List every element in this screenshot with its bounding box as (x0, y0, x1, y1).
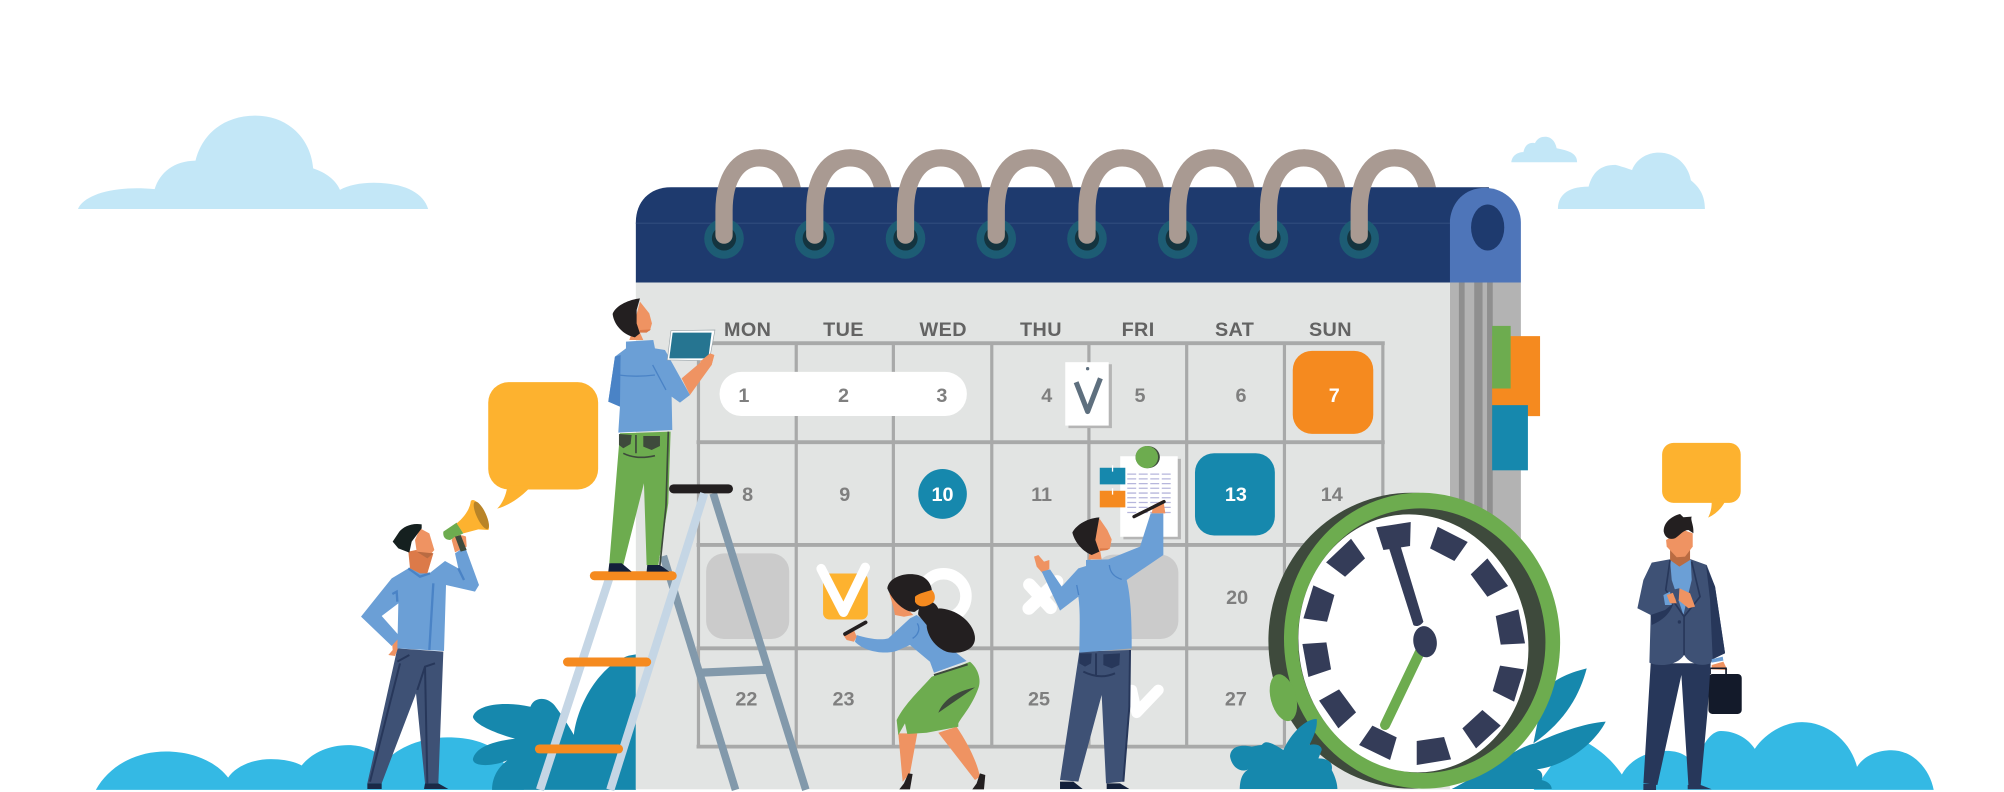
pants details (623, 432, 668, 565)
pockets (619, 434, 660, 450)
shirt (1670, 560, 1692, 615)
grey date block (706, 553, 789, 639)
legs (898, 727, 980, 782)
grey date block right (1095, 555, 1178, 639)
top and arm (855, 615, 967, 673)
pant seams (370, 655, 435, 783)
calendar: weekday labels: MON (724, 319, 771, 341)
calendar: date numbers: 11 (1031, 484, 1052, 506)
hair (1072, 517, 1099, 555)
pockets (1079, 653, 1120, 668)
calendar: date numbers: 14 (1321, 484, 1343, 506)
sleeve shade (1706, 565, 1725, 659)
pants (367, 648, 443, 783)
calendar: date numbers: 22 (735, 688, 757, 710)
calendar: weekday labels (724, 319, 1352, 341)
calendar: side pages (1450, 282, 1521, 576)
pinned document with notes (1100, 446, 1181, 539)
button (1678, 620, 1681, 624)
calendar: header band (636, 187, 1489, 282)
calendar: date numbers: 7 (1329, 385, 1340, 407)
hair (393, 524, 422, 553)
calendar: spiral ring fronts (724, 158, 1394, 235)
ladder (539, 489, 806, 790)
calendar: weekday labels: SAT (1215, 319, 1254, 341)
calendar: date numbers: 9 (839, 484, 850, 506)
neck (1670, 550, 1690, 567)
sleeve fold (1077, 565, 1122, 595)
face and neck (629, 302, 652, 340)
tablet (667, 330, 715, 370)
lapels (1666, 560, 1700, 655)
plant: teal leaves left (473, 654, 636, 790)
person: man pinning note (1034, 500, 1165, 789)
person: man with megaphone (361, 500, 492, 789)
white circle mark (921, 574, 966, 618)
calendar: date numbers: 27 (1225, 688, 1247, 710)
shoes (367, 783, 448, 789)
calendar: date numbers: 25 (1028, 688, 1050, 710)
shirt (1042, 513, 1163, 653)
bushes: light blue right (1534, 722, 1934, 790)
clock: green rim (1272, 481, 1572, 792)
calendar (636, 158, 1540, 789)
date 7 highlight (1293, 351, 1373, 434)
face (415, 528, 434, 555)
date 10 highlight (918, 469, 967, 519)
ladder: front legs (540, 493, 704, 790)
yellow date with check (821, 567, 868, 619)
heels (899, 773, 985, 789)
belt (934, 664, 968, 675)
cuff (1712, 657, 1723, 663)
calendar: date numbers: 23 (833, 688, 855, 710)
arm (682, 353, 714, 395)
plant: teal leaves behind clock (1452, 668, 1606, 789)
jacket (1637, 559, 1725, 665)
speech bubble: left (488, 382, 598, 509)
calendar: date numbers: 10 (932, 484, 954, 506)
right hand (1152, 500, 1165, 513)
calendar: date numbers: 2 (838, 385, 849, 407)
shirt (361, 547, 479, 651)
clock: inner dark rim (1287, 498, 1556, 783)
calendar: date numbers: 8 (742, 484, 753, 506)
leaf: green on clock (1265, 671, 1302, 724)
shirt details (392, 568, 464, 650)
date 13 highlight (1195, 453, 1275, 535)
cloud: small right (1511, 137, 1577, 162)
pinned note with check (1065, 362, 1112, 428)
person: woman writing (843, 574, 985, 789)
face and neck (1088, 518, 1112, 559)
left hand (1034, 555, 1049, 573)
sleeve shade (608, 355, 621, 407)
ladder: top cap (674, 485, 728, 492)
pants details (1083, 650, 1130, 782)
beard shade (417, 552, 433, 558)
chin shade (640, 329, 651, 333)
clock: hands (1385, 547, 1439, 725)
pants (1643, 663, 1711, 785)
hands (1667, 588, 1695, 608)
calendar: weekday labels: SUN (1309, 319, 1352, 341)
bushes: light blue left (96, 737, 524, 790)
calendar: weekday labels: THU (1020, 319, 1062, 341)
speech bubble: right (1662, 443, 1741, 518)
shirt seams (618, 365, 666, 390)
calendar: spiral ring backs (759, 158, 1429, 198)
briefcase (1708, 662, 1742, 714)
hair bow (915, 590, 935, 606)
megaphone (443, 500, 492, 552)
shoes (608, 563, 669, 572)
plant: teal front of clock (1230, 719, 1337, 789)
ladder: orange steps (539, 576, 672, 749)
calendar: weekday labels: TUE (823, 319, 864, 341)
face (1666, 530, 1693, 557)
person: businessman with briefcase (1637, 514, 1742, 790)
hair (613, 298, 640, 337)
white check mark (1132, 690, 1158, 713)
calendar: date numbers (735, 385, 1343, 710)
hair (1664, 514, 1693, 539)
shirt (608, 340, 690, 433)
pants (609, 432, 671, 565)
neck (408, 550, 433, 573)
white x mark (1029, 582, 1057, 608)
side tabs (1492, 326, 1540, 470)
calendar: highlighted range pill (720, 372, 967, 416)
clock group (1230, 481, 1606, 792)
calendar: weekday labels: WED (920, 319, 967, 341)
calendar: date numbers: 4 (1041, 385, 1052, 407)
pants (1060, 650, 1130, 783)
hair and bun (887, 574, 975, 653)
ladder: back legs (663, 493, 806, 790)
clock: hour tiles (1302, 522, 1525, 765)
hand (843, 628, 857, 642)
clock: dark rim shadow (1268, 493, 1555, 789)
hip hand (388, 638, 401, 656)
cloud: large left (78, 116, 428, 209)
calendar: date numbers: 1 (738, 385, 749, 407)
shoes (1643, 784, 1712, 790)
calendar: eyelets (704, 218, 1379, 259)
cuff left (1663, 592, 1672, 605)
skirt (897, 662, 980, 735)
calendar: page (636, 282, 1450, 789)
sleeve fold (1651, 603, 1673, 625)
pen (845, 622, 866, 634)
clock: white face (1280, 498, 1547, 789)
shoes (1060, 782, 1129, 789)
calendar: date numbers: 6 (1235, 385, 1247, 407)
watch (1672, 588, 1679, 600)
face (889, 593, 913, 617)
calendar: grid (697, 343, 1385, 747)
calendar: date numbers: 5 (1135, 385, 1146, 407)
chin shade (1100, 548, 1110, 551)
calendar: date numbers: 13 (1225, 484, 1247, 506)
calendar: blue side cap (1450, 188, 1521, 282)
pen (1134, 502, 1164, 517)
skirt fold (938, 687, 975, 713)
sleeve fold (913, 623, 919, 638)
cloud: medium right (1558, 153, 1705, 209)
calendar: date numbers: 20 (1226, 587, 1248, 609)
person: man on ladder with tablet (608, 298, 715, 572)
calendar: weekday labels: FRI (1122, 319, 1155, 341)
calendar: date numbers: 3 (936, 385, 947, 407)
